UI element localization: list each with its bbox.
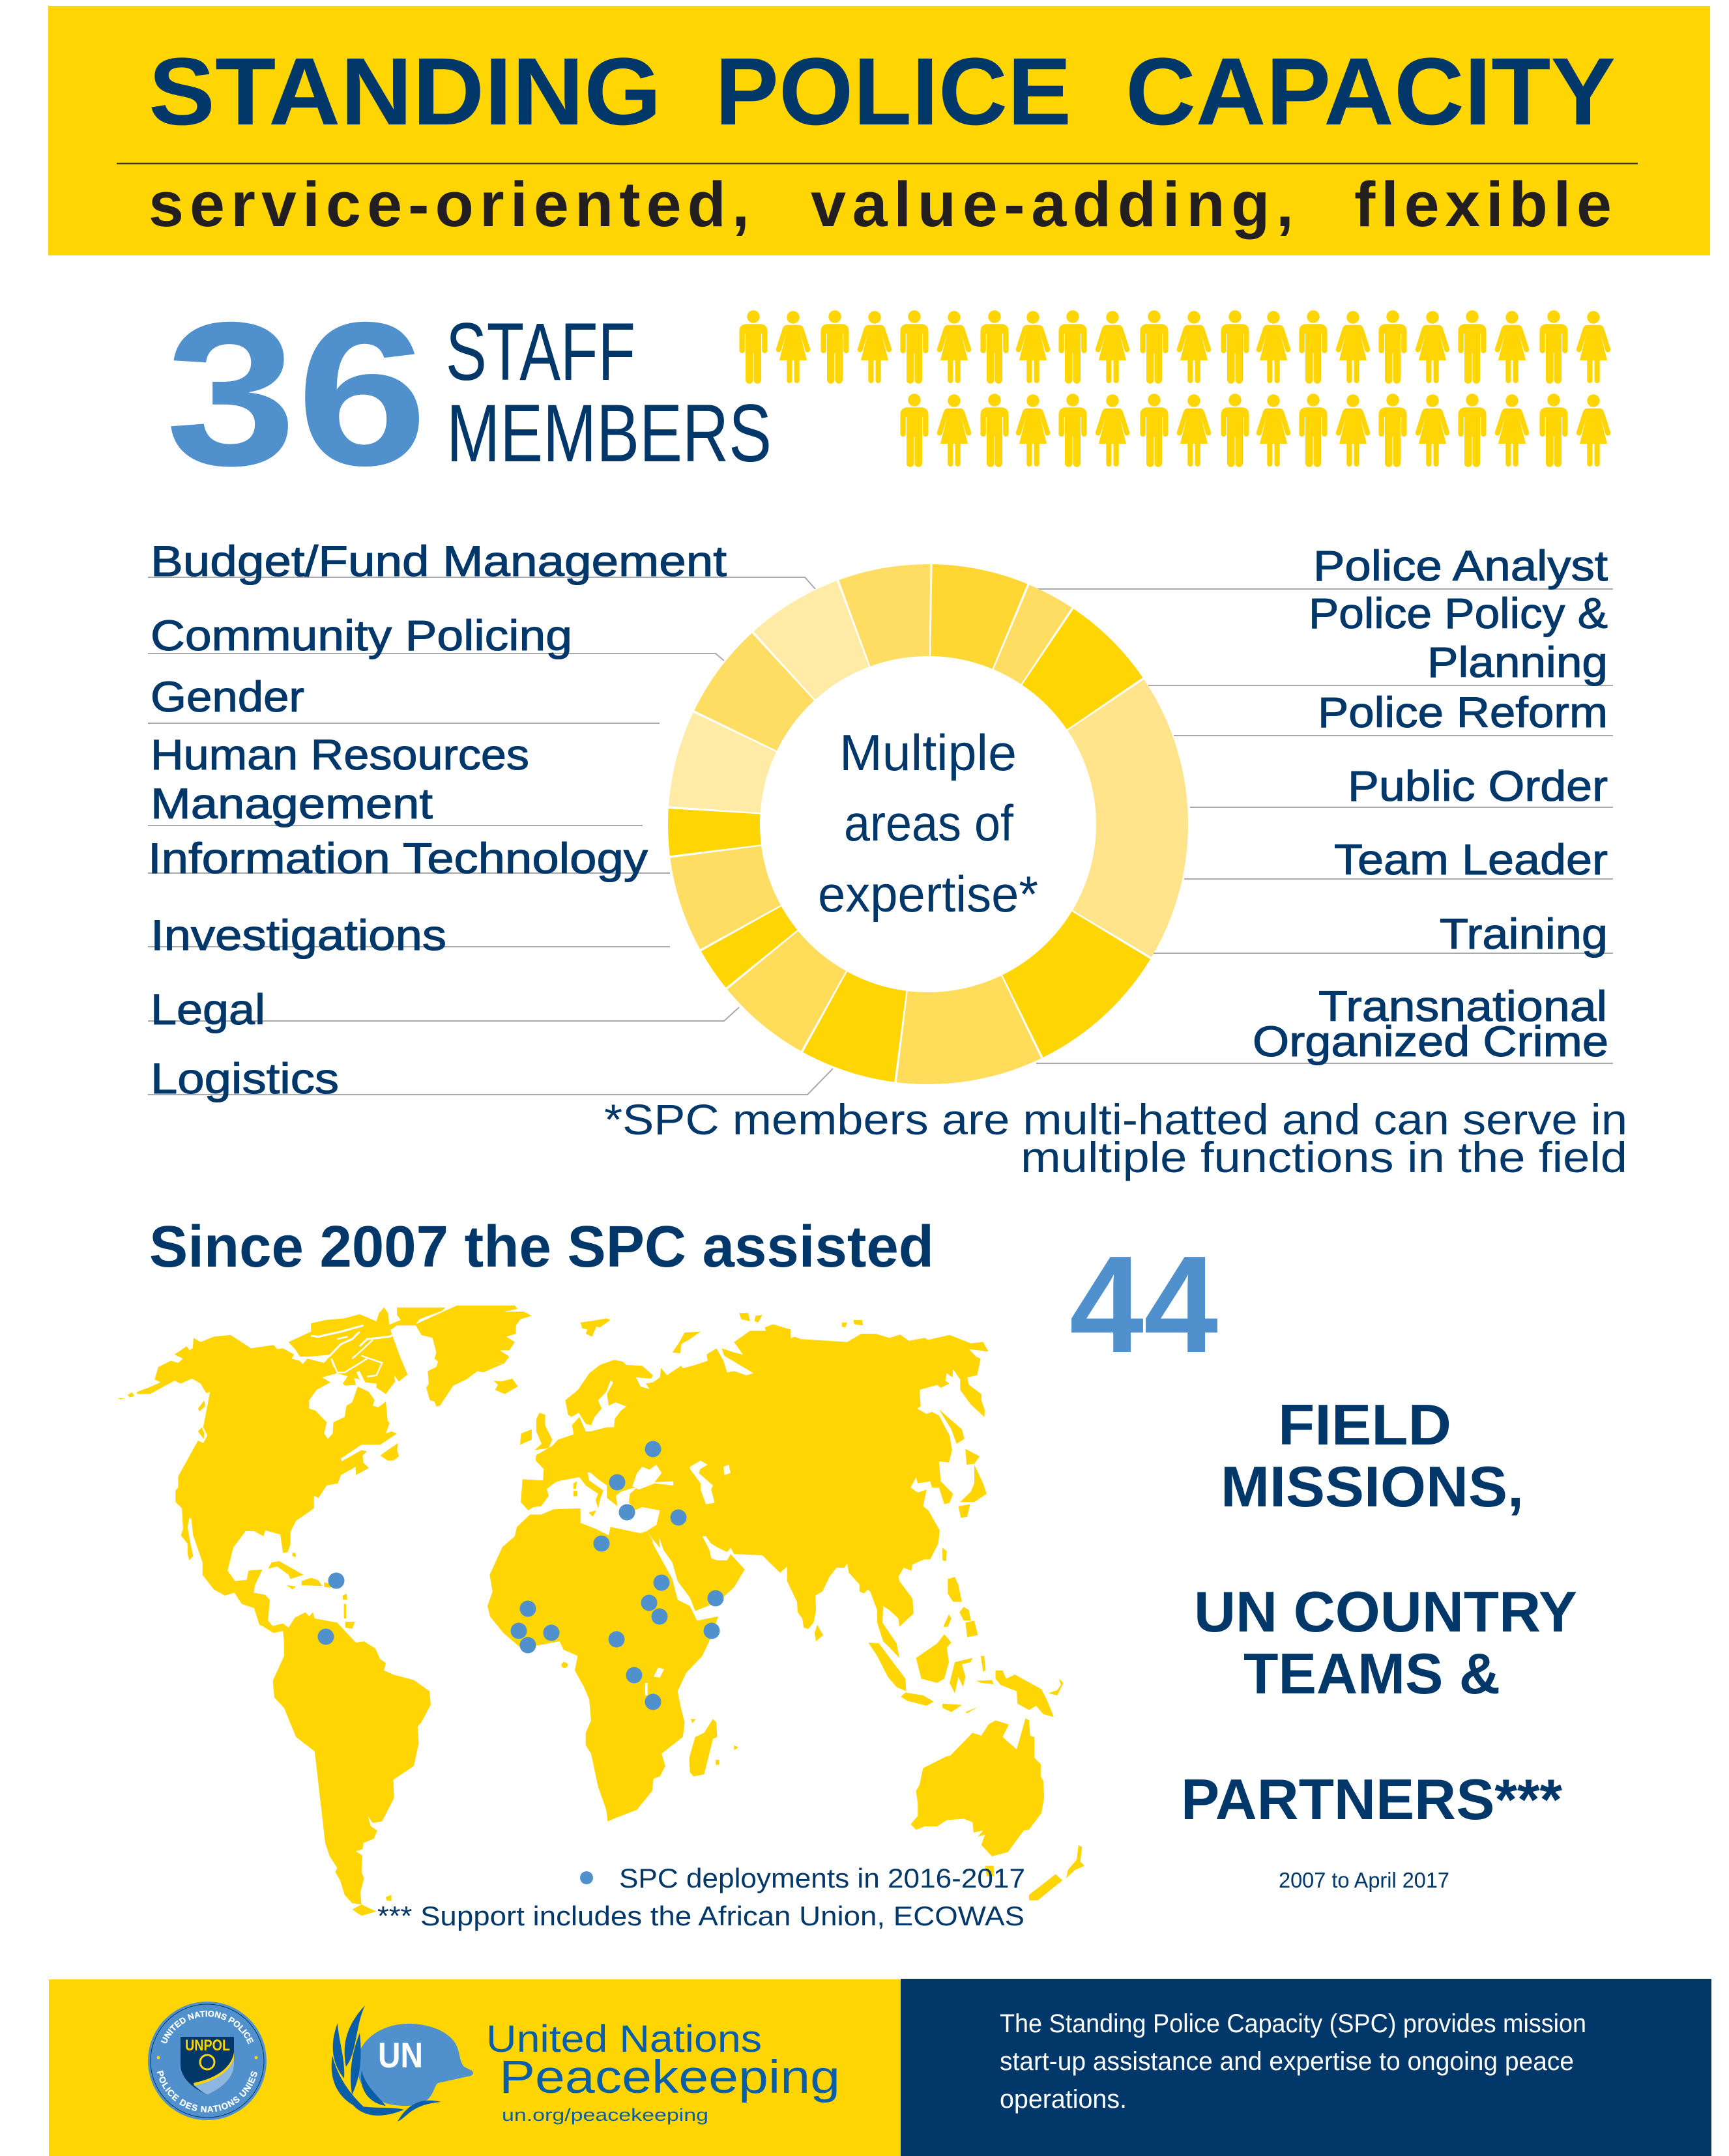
labels: right expertise areas: Training [1440, 910, 1608, 958]
staff members label: STAFF [446, 307, 635, 397]
title: STANDING [149, 38, 661, 145]
labels: left expertise areas: Logistics [151, 1054, 339, 1102]
footnote: multi-hatted: *SPC members are multi-hatted and can serve in [604, 1095, 1627, 1143]
labels: right expertise areas: Transnational [1318, 982, 1607, 1030]
icon: UN helmet and olive branch [332, 2005, 473, 2121]
footer: navy description panel: The Standing Police Capacity (SPC) provides mission [1000, 2009, 1586, 2038]
number 44: 44 [1069, 1227, 1218, 1381]
footer: yellow logo panel [49, 1979, 901, 2156]
footer: navy description panel [901, 1979, 1711, 2156]
footnote: multi-hatted: multiple functions in the field [1021, 1133, 1627, 1181]
labels: left expertise areas: Budget/Fund Management [151, 537, 727, 585]
header banner [48, 6, 1710, 255]
subtitle: flexible [1354, 169, 1612, 240]
leader lines [148, 577, 1613, 1095]
donut centre text: expertise* [818, 865, 1038, 923]
field missions text: UN COUNTRY [1194, 1579, 1577, 1644]
footnote: multi-hatted [604, 1095, 1627, 1181]
field missions text: TEAMS & [1243, 1641, 1500, 1706]
field missions text: MISSIONS, [1221, 1454, 1524, 1519]
peacekeeping wordmark: United Nations [486, 2018, 762, 2060]
labels: left expertise areas: Investigations [151, 911, 446, 959]
icon: UNPOL badge: POLICE DES NATIONS UNIES [156, 2071, 257, 2112]
icon: UN helmet and olive branch: UN [378, 2035, 423, 2075]
donut centre text: Multiple [839, 724, 1017, 781]
labels: left expertise areas [148, 537, 727, 1102]
labels: left expertise areas: Human Resources [151, 730, 529, 779]
labels: right expertise areas: Police Analyst [1313, 541, 1608, 590]
staff count number: 36 [166, 280, 428, 508]
labels: left expertise areas: Information Technology [148, 834, 648, 882]
field missions text: FIELD [1278, 1392, 1451, 1457]
map: inland seas and lakes [632, 1461, 731, 1695]
donut centre text [818, 724, 1038, 923]
subtitle: service-oriented, [149, 169, 749, 240]
subtitle: value-adding, [811, 169, 1294, 240]
map legend: *** Support includes the African Union, ECOWAS [377, 1901, 1024, 1931]
footer: navy description panel: operations. [1000, 2085, 1127, 2114]
field missions text: PARTNERS*** [1181, 1767, 1563, 1832]
labels: right expertise areas [1253, 541, 1608, 1065]
labels: left expertise areas: Management [151, 779, 433, 827]
map: europe, africa, asia and oceania [487, 1313, 1084, 1901]
labels: left expertise areas: Legal [151, 985, 265, 1033]
labels: right expertise areas: Public Order [1348, 762, 1608, 810]
donut chart: areas of expertise [626, 522, 1230, 1127]
labels: right expertise areas: Organized Crime [1253, 1017, 1608, 1065]
icon: UNPOL badge [148, 2002, 267, 2120]
subtitle [149, 169, 1612, 240]
date range note: 2007 to April 2017 [1279, 1868, 1449, 1892]
staff members label: MEMBERS [446, 388, 772, 479]
peacekeeping wordmark: Peacekeeping [499, 2052, 840, 2103]
donut centre text: areas of [844, 794, 1013, 852]
icons: staff people pictogram rows [739, 310, 1610, 467]
labels: right expertise areas: Planning [1427, 638, 1608, 686]
peacekeeping wordmark [486, 2018, 840, 2125]
labels: left expertise areas: Gender [151, 672, 304, 721]
icon: UNPOL badge: UNITED NATIONS POLICE [160, 2011, 254, 2045]
labels: left expertise areas: Community Policing [151, 611, 572, 659]
map: canadian arctic islands [289, 1308, 407, 1394]
labels: right expertise areas: Police Policy & [1309, 589, 1608, 637]
map: deployment dots [318, 1441, 723, 1710]
footer: navy description panel: start-up assistance and expertise to ongoing peace [1000, 2047, 1574, 2076]
world map [117, 1306, 1084, 1916]
map legend [377, 1863, 1025, 1931]
heading: since 2007: Since 2007 the SPC assisted [149, 1215, 934, 1280]
field missions text [1181, 1392, 1577, 1832]
title: POLICE [715, 38, 1071, 145]
title [149, 38, 1616, 145]
peacekeeping wordmark: un.org/peacekeeping [502, 2105, 708, 2125]
map: americas and greenland [117, 1306, 532, 1916]
title: CAPACITY [1126, 38, 1616, 145]
labels: right expertise areas: Police Reform [1318, 688, 1608, 736]
icon: UNPOL badge: UNPOL [185, 2037, 230, 2054]
labels: right expertise areas: Team Leader [1334, 835, 1608, 884]
map legend: SPC deployments in 2016-2017 [619, 1863, 1025, 1893]
staff members label [446, 307, 772, 479]
